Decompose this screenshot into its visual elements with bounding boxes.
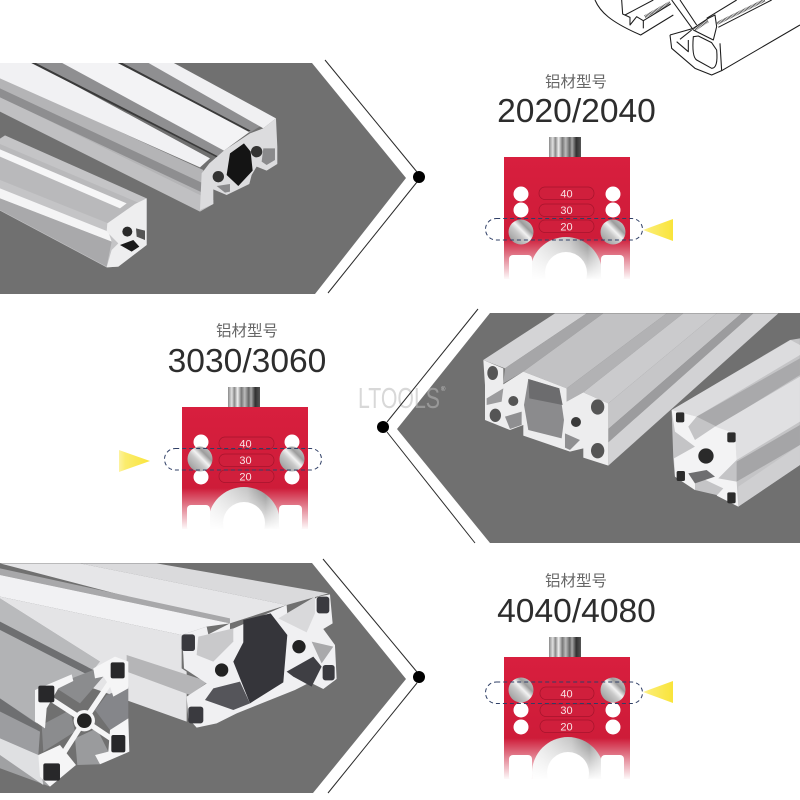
heading: 3030/3060 bbox=[168, 322, 326, 380]
positioning block: 4040 setting: 20 bbox=[560, 722, 573, 734]
watermark: LTOOLS: ® bbox=[441, 386, 446, 393]
positioning block: 3030 setting: 20 bbox=[239, 472, 252, 484]
positioning block: 2020 setting: 20 bbox=[560, 222, 573, 234]
panel: 4040/4080 product photo background bbox=[0, 563, 406, 793]
watermark: LTOOLS: LTOOLS bbox=[358, 383, 440, 415]
photo: 3030 and 3060 aluminium profiles bbox=[483, 313, 800, 507]
heading: 3030/3060: 3030/3060 bbox=[168, 343, 326, 380]
positioning block: 3030 setting: 40 bbox=[239, 438, 252, 450]
positioning block: 2020 setting: 40 bbox=[560, 188, 573, 200]
heading: 3030/3060: 铝材型号 bbox=[216, 322, 278, 340]
positioning block: 4040 setting bbox=[486, 637, 642, 800]
positioning block: 2020 setting: 30 bbox=[560, 205, 573, 217]
heading: 4040/4080: 4040/4080 bbox=[497, 593, 656, 630]
positioning block: 3030 setting: 30 bbox=[239, 455, 252, 467]
arrow bracket: panel 3 connector bbox=[323, 559, 425, 793]
arrow bracket: panel 2 connector bbox=[377, 309, 478, 543]
positioning block: 4040 setting: 40 bbox=[560, 688, 573, 700]
indicator arrow: yellow pointer to 20 bbox=[643, 219, 673, 241]
indicator arrow: yellow pointer to 40 bbox=[643, 681, 673, 703]
positioning block: 2020 setting bbox=[486, 137, 642, 313]
photo: 2020 and 2040 aluminium profiles bbox=[0, 60, 277, 267]
heading: 4040/4080 bbox=[497, 572, 656, 630]
line drawing: profile cross-section top right bbox=[595, 0, 800, 75]
panel: 2020/2040 product photo background bbox=[0, 60, 406, 294]
arrow bracket: panel 1 connector bbox=[325, 60, 425, 293]
positioning block: 4040 setting: 30 bbox=[560, 705, 573, 717]
positioning block: 3030 setting bbox=[164, 387, 322, 563]
heading: 2020/2040 bbox=[497, 73, 656, 130]
indicator arrow: yellow pointer to 30 bbox=[119, 450, 150, 472]
heading: 2020/2040: 铝材型号 bbox=[545, 73, 607, 91]
heading: 4040/4080: 铝材型号 bbox=[545, 572, 607, 590]
heading: 2020/2040: 2020/2040 bbox=[497, 93, 656, 130]
panel: 3030/3060 product photo background bbox=[397, 313, 800, 543]
photo: 4040 and 4080 aluminium profiles bbox=[0, 563, 337, 787]
